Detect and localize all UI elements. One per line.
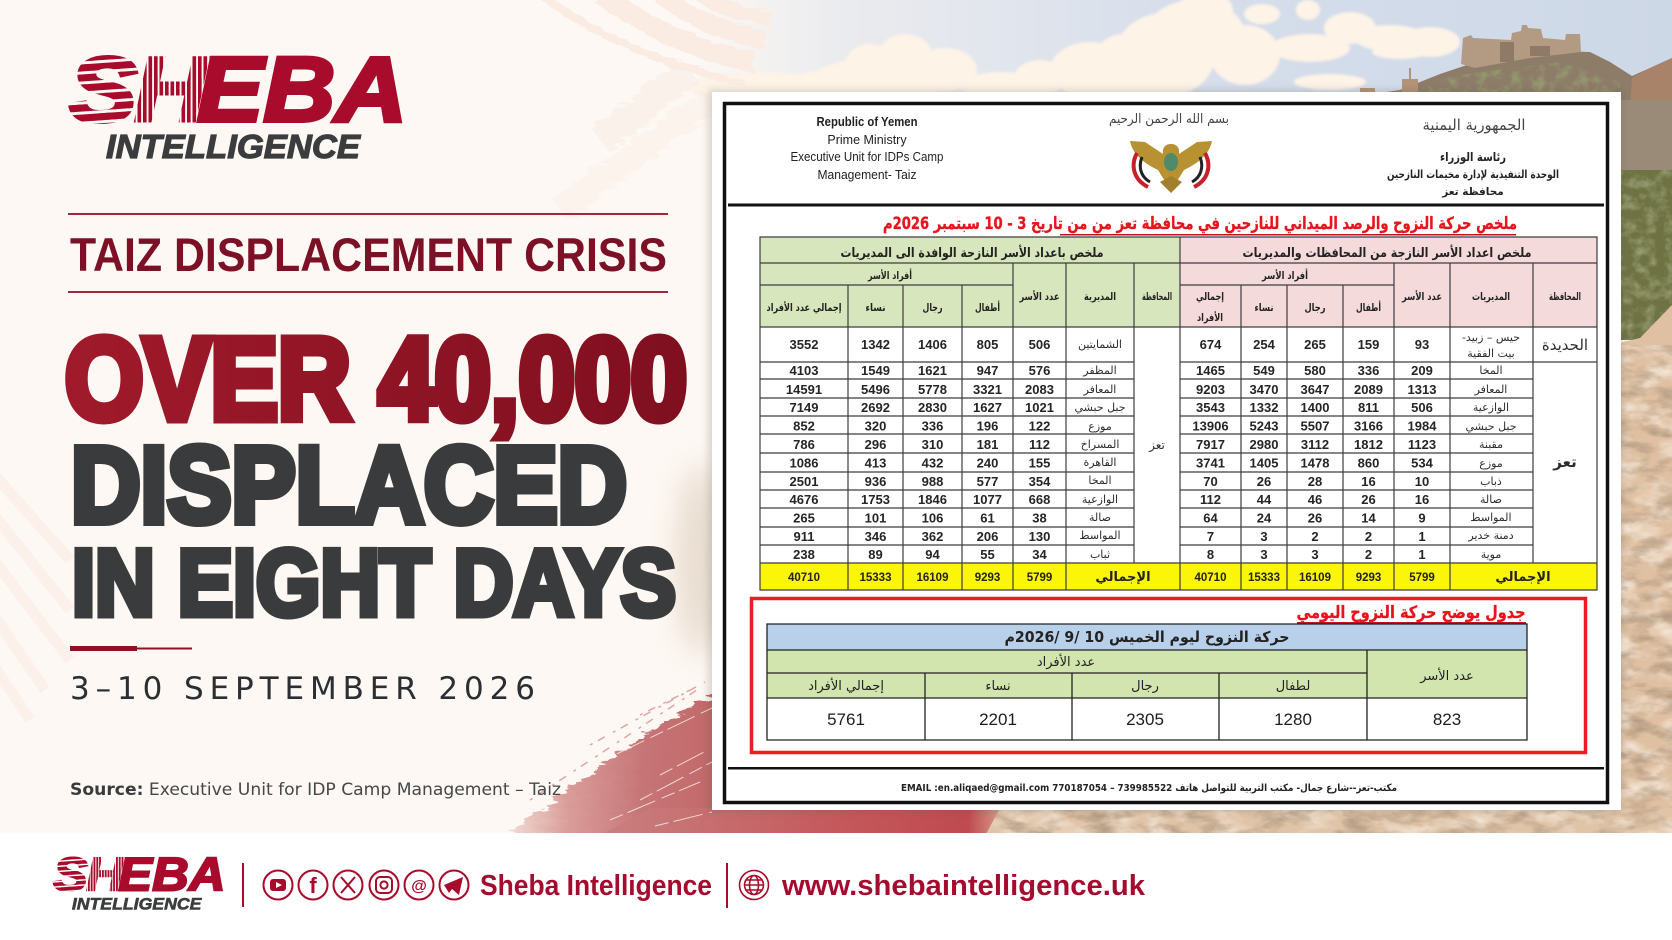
left row: Al-Shamayatain: 1342 bbox=[861, 337, 890, 352]
background: faint brush arcs top bbox=[540, 0, 770, 210]
date: 3–10 SEPTEMBER 2026 bbox=[70, 671, 535, 707]
daily box title: جدول يوضح حركة النزوح اليومي bbox=[1296, 603, 1526, 623]
daily table values: 823 bbox=[1433, 710, 1461, 729]
left row: Al-Wazeiyah: 1077 bbox=[973, 492, 1002, 507]
right row: Jabal Habashi bbox=[1192, 418, 1517, 434]
footer: white band bbox=[0, 833, 1672, 940]
document header: English: Executive Unit for IDPs Camp bbox=[790, 150, 944, 164]
right row: totals: 40710 bbox=[1195, 572, 1226, 584]
headline: over 40,000: OVER 40,000 bbox=[65, 314, 687, 444]
left row: Al-Qahirah: 155 bbox=[1029, 456, 1050, 470]
left row: Al-Muzaffar: 947 bbox=[977, 363, 998, 378]
source line: Source: Executive Unit for IDP Camp Management – Taiz bbox=[70, 780, 561, 800]
right row: Maqbanah: مقبنة bbox=[1479, 438, 1503, 451]
left row: Al-Qahirah: 413 bbox=[865, 456, 886, 470]
right row: Mawiyah: 2 bbox=[1365, 547, 1372, 562]
footer divider bbox=[242, 863, 244, 907]
table headers: displaced families (right): عدد الأسر bbox=[1401, 290, 1442, 303]
icon: facebook bbox=[298, 870, 328, 900]
document header: Arabic: الوحدة التنفيذية لإدارة مخيمات النازحين bbox=[1387, 168, 1559, 181]
panel: official document bbox=[712, 92, 1621, 810]
right row: Salah: 16 bbox=[1415, 492, 1429, 507]
daily table column labels bbox=[808, 653, 1474, 694]
left row: Al-Wazeiyah: 1846 bbox=[918, 492, 947, 507]
right row: Al-Maafer: 3470 bbox=[1250, 382, 1278, 397]
left row: Al-Muzaffar: 576 bbox=[1029, 363, 1050, 378]
icon: threads: @ bbox=[411, 878, 427, 895]
right row: Dimnat Khadir: 3 bbox=[1260, 529, 1268, 544]
right row: Dhubab: ذباب bbox=[1480, 475, 1502, 488]
left row: Al-Wazeiyah bbox=[790, 492, 1118, 507]
left row: Al-Mawasit: 346 bbox=[865, 529, 886, 544]
left row: Thubab: 94 bbox=[925, 547, 940, 562]
left row: Al-Muzaffar: 1549 bbox=[861, 363, 890, 378]
right row: Al-Maafer bbox=[1196, 382, 1507, 397]
logo: Sheba Intelligence: H bbox=[134, 39, 209, 141]
right row: Jabal Habashi: 5507 bbox=[1301, 418, 1329, 434]
document header: English: Management- Taiz bbox=[818, 168, 916, 182]
accent bar bbox=[70, 646, 192, 651]
table headers: displaced families (right): نساء bbox=[1254, 302, 1274, 314]
right row: Dimnat Khadir: دمنة خدير bbox=[1467, 529, 1514, 542]
daily table column labels: نساء bbox=[985, 679, 1011, 694]
left row: Al-Shamayatain bbox=[790, 337, 1122, 352]
right row: Mawiyah bbox=[1207, 547, 1501, 562]
left row: Salah: 106 bbox=[922, 510, 943, 526]
document footer contact line: مكتب-تعز--شارع جمال- مكتب التربية للتواصل هاتف 739985522 – 770187054 EMAIL :en.aliqaed@gmail.com bbox=[901, 783, 1397, 794]
background: faint brush stripes left bbox=[0, 470, 70, 720]
right row: Al-Mawasit: 14 bbox=[1361, 510, 1376, 526]
left row: Al-Maafer: المعافر bbox=[1083, 383, 1116, 396]
title block: Taiz displacement crisis with rules: TAIZ DISPLACEMENT CRISIS bbox=[70, 228, 667, 281]
left row: Thubab: ثباب bbox=[1090, 548, 1110, 561]
right row: Al-Wazeiyah: 811 bbox=[1358, 400, 1379, 415]
right row: Hays Zabid Bayt al-Faqih: 674 bbox=[1200, 337, 1222, 352]
right row: Mawza bbox=[1196, 456, 1503, 470]
table headers: displaced families (right): الأفراد bbox=[1197, 311, 1223, 324]
footer brand name: Sheba Intelligence bbox=[480, 870, 712, 902]
left row: totals: 5799 bbox=[1027, 572, 1052, 584]
footer website: www.shebaintelligence.uk bbox=[781, 870, 1146, 902]
right row: Hays Zabid Bayt al-Faqih bbox=[1200, 331, 1520, 360]
left row: Al-Wazeiyah: 4676 bbox=[790, 492, 818, 507]
footer logo: S bbox=[53, 849, 88, 901]
right row: Al-Maafer: 1313 bbox=[1408, 382, 1436, 397]
logo: Sheba Intelligence: INTELLIGENCE bbox=[106, 128, 361, 165]
footer logo bbox=[53, 849, 225, 914]
daily table column labels: رجال bbox=[1131, 679, 1159, 694]
right row: Al-Wazeiyah: 506 bbox=[1411, 400, 1433, 415]
right row: totals: 16109 bbox=[1299, 572, 1331, 584]
daily table column labels: عدد الأسر bbox=[1419, 667, 1474, 684]
table headers: arriving families (left) bbox=[766, 244, 1172, 314]
right row: Al-Maafer: 2089 bbox=[1354, 382, 1383, 397]
left row: Salah: 101 bbox=[865, 510, 886, 526]
right row: Hays Zabid Bayt al-Faqih: بيت الفقية bbox=[1467, 347, 1515, 360]
left row: Al-Maafer: 5496 bbox=[861, 382, 890, 397]
icon: x bbox=[334, 870, 362, 900]
right row: Dimnat Khadir: 2 bbox=[1311, 529, 1319, 544]
right row: totals: الإجمالي bbox=[1495, 570, 1551, 585]
left row: Al-Misrakh: المسراخ bbox=[1081, 438, 1119, 451]
right row: Dhubab: 16 bbox=[1361, 474, 1376, 489]
right row: Jabal Habashi: 3166 bbox=[1354, 418, 1383, 434]
left row: Al-Maafer: 2083 bbox=[1025, 382, 1054, 397]
daily table column labels: إجمالي الأفراد bbox=[808, 677, 884, 694]
background: right rocky hillside bbox=[1610, 100, 1672, 833]
right row: Al-Wazeiyah: الوازعية bbox=[1473, 401, 1509, 414]
right row: Hays Zabid Bayt al-Faqih: 254 bbox=[1253, 337, 1276, 352]
left row: Al-Misrakh: 181 bbox=[977, 437, 998, 452]
left row: Al-Shamayatain: الشمايتين bbox=[1078, 338, 1122, 351]
right row: Mawza: 1405 bbox=[1250, 456, 1278, 470]
icon: threads bbox=[404, 870, 434, 900]
table headers: arriving families (left): ملخص باعداد الأسر النازحة الوافدة الى المديريات bbox=[840, 244, 1104, 261]
table headers: arriving families (left): إجمالي عدد الأفراد bbox=[766, 301, 842, 314]
right row: Al-Makha bbox=[1196, 363, 1503, 378]
footer logo: H bbox=[86, 849, 124, 901]
left row: Al-Mawasit: 130 bbox=[1029, 529, 1050, 544]
right row: Dhubab: 70 bbox=[1203, 474, 1218, 489]
right row: Salah bbox=[1200, 492, 1502, 507]
right row: Salah: 46 bbox=[1308, 492, 1322, 507]
right row: Al-Makha: المخا bbox=[1479, 364, 1503, 377]
left row: Al-Muzaffar bbox=[790, 363, 1117, 378]
right row: Mawiyah: 3 bbox=[1311, 547, 1319, 562]
left row: Al-Shamayatain: 3552 bbox=[790, 337, 818, 352]
left row: Al-Wazeiyah: 1753 bbox=[861, 492, 890, 507]
left row: Al-Misrakh: 786 bbox=[793, 437, 815, 452]
left row: Thubab: 34 bbox=[1032, 547, 1047, 562]
left row: Al-Makha: 577 bbox=[977, 474, 998, 489]
table headers: displaced families (right): أطفال bbox=[1356, 300, 1381, 314]
left row: Jabal Habashi: 2692 bbox=[861, 400, 890, 415]
right row: totals: 9293 bbox=[1356, 572, 1381, 584]
left row: totals bbox=[788, 570, 1151, 585]
document header: English bbox=[790, 115, 944, 182]
left row: Al-Qahirah: 1086 bbox=[790, 456, 818, 470]
left row: totals: 15333 bbox=[860, 572, 891, 584]
document title: ملخص حركة النزوح والرصد الميداني للنازحين في محافظة تعز من من تاريخ 3 - 10 سبتمبر 2026م bbox=[883, 214, 1517, 234]
right row: Salah: صالة bbox=[1480, 493, 1502, 506]
table headers: arriving families (left): عدد الأسر bbox=[1019, 290, 1060, 303]
right row: Maqbanah bbox=[1196, 437, 1503, 452]
right row: Mawiyah: موية bbox=[1481, 548, 1501, 561]
right row: Al-Makha: 209 bbox=[1411, 363, 1433, 378]
right row: Al-Wazeiyah: 1400 bbox=[1301, 400, 1329, 415]
left row: Jabal Habashi: 2830 bbox=[918, 400, 947, 415]
icon: telegram bbox=[440, 870, 468, 900]
background: bottom rock strip bbox=[960, 808, 1672, 833]
right row: Al-Makha: 580 bbox=[1304, 363, 1326, 378]
left row: Al-Maafer: 14591 bbox=[786, 382, 822, 397]
left row: Jabal Habashi: جبل حبشي bbox=[1074, 401, 1126, 414]
right row: Maqbanah: 1812 bbox=[1354, 437, 1383, 452]
right row: Hays Zabid Bayt al-Faqih: 265 bbox=[1304, 337, 1326, 352]
document header: bismillah: بسم الله الرحمن الرحيم bbox=[1109, 112, 1229, 127]
left row: Mawza: 336 bbox=[922, 418, 943, 434]
right row: Al-Mawasit: 24 bbox=[1257, 510, 1272, 526]
right row: Maqbanah: 2980 bbox=[1250, 437, 1278, 452]
table: displaced families summary bbox=[760, 237, 1597, 590]
table headers: arriving families (left): نساء bbox=[866, 302, 886, 314]
left row: Mawza: 320 bbox=[865, 418, 886, 434]
right row: Mawiyah: 8 bbox=[1207, 547, 1214, 562]
right row: Maqbanah: 7917 bbox=[1196, 437, 1225, 452]
footer social icons bbox=[264, 870, 468, 900]
left row: Al-Wazeiyah: 668 bbox=[1029, 492, 1050, 507]
table headers: arriving families (left): أفراد الأسر bbox=[867, 268, 912, 282]
table headers: arriving families (left): رجال bbox=[922, 302, 942, 314]
left row: Al-Maafer bbox=[786, 382, 1116, 397]
left row: Thubab: 89 bbox=[868, 547, 883, 562]
panel shadow bbox=[708, 90, 1622, 812]
right row: Al-Makha: 336 bbox=[1358, 363, 1379, 378]
left row: Al-Mawasit: المواسط bbox=[1079, 529, 1121, 542]
icon: Yemen emblem bbox=[1130, 141, 1212, 193]
right row: Mawza: موزع bbox=[1479, 457, 1503, 470]
governorate labels bbox=[1148, 336, 1588, 471]
background: sky bbox=[690, 0, 1672, 110]
daily table values bbox=[827, 710, 1461, 729]
right row: Al-Mawasit: 64 bbox=[1203, 510, 1218, 526]
logo: Sheba Intelligence: S bbox=[69, 39, 137, 141]
right row: Dhubab: 26 bbox=[1257, 474, 1271, 489]
left row: Al-Makha: 2501 bbox=[790, 474, 818, 489]
right row: Al-Mawasit: 26 bbox=[1308, 510, 1322, 526]
document header: Arabic: رئاسة الوزراء bbox=[1440, 150, 1506, 165]
right row: Jabal Habashi: 5243 bbox=[1250, 418, 1278, 434]
left row: Al-Misrakh: 296 bbox=[865, 437, 886, 452]
left row: totals: 40710 bbox=[788, 572, 820, 584]
right row: Dhubab bbox=[1203, 474, 1502, 489]
left row: Al-Makha: 936 bbox=[865, 474, 886, 489]
right row: Mawza: 534 bbox=[1411, 456, 1434, 470]
left row: Thubab: 55 bbox=[980, 547, 995, 562]
right row: Al-Wazeiyah: 1332 bbox=[1250, 400, 1278, 415]
table: daily displacement bbox=[767, 624, 1527, 740]
table headers: displaced families (right): ملخص اعداد الأسر النازجة من المحافظات والمديريات bbox=[1242, 244, 1532, 261]
left row: Salah: 61 bbox=[980, 510, 995, 526]
document header: Arabic: الجمهورية اليمنية bbox=[1422, 116, 1526, 134]
right row: Dimnat Khadir: 7 bbox=[1207, 529, 1214, 544]
daily table values: 2201 bbox=[979, 710, 1017, 729]
left row: totals: 16109 bbox=[917, 572, 948, 584]
document header: Arabic: محافظة تعز bbox=[1441, 186, 1504, 198]
right row: Maqbanah: 1123 bbox=[1408, 437, 1436, 452]
right row: Al-Mawasit: 9 bbox=[1418, 510, 1426, 526]
governorate labels: الحديدة bbox=[1542, 336, 1588, 354]
governorate labels: تعز bbox=[1552, 453, 1577, 471]
left row: Mawza bbox=[793, 418, 1112, 434]
governorate labels: تعز bbox=[1148, 438, 1165, 453]
daily table values: 5761 bbox=[827, 710, 865, 729]
right row: Dimnat Khadir bbox=[1207, 529, 1514, 544]
left row: Al-Makha: 354 bbox=[1029, 474, 1051, 489]
right row: totals bbox=[1195, 570, 1551, 585]
right row: Dhubab: 28 bbox=[1308, 474, 1322, 489]
left row: Al-Mawasit: 911 bbox=[794, 529, 814, 544]
headline: displaced: DISPLACED bbox=[71, 424, 627, 545]
daily table heading: حركة النزوح ليوم الخميس 10 /9 /2026م bbox=[1004, 628, 1290, 646]
right row: totals: 5799 bbox=[1409, 572, 1435, 584]
logo: Sheba Intelligence: EBA bbox=[197, 39, 407, 141]
table headers: displaced families (right) bbox=[1196, 244, 1581, 324]
left row: Mawza: 122 bbox=[1029, 418, 1050, 434]
left row: totals: 9293 bbox=[975, 572, 1000, 584]
left row: Mawza: 852 bbox=[793, 418, 815, 434]
left row: Thubab bbox=[793, 547, 1110, 562]
right row: Hays Zabid Bayt al-Faqih: 159 bbox=[1358, 337, 1379, 352]
right row: Al-Makha: 549 bbox=[1253, 363, 1275, 378]
left row: Al-Qahirah: 432 bbox=[922, 456, 943, 470]
left row: Al-Mawasit: 362 bbox=[922, 529, 943, 544]
left row: Salah: صالة bbox=[1089, 511, 1111, 524]
panel: daily displacement box bbox=[752, 598, 1586, 752]
daily table values: 1280 bbox=[1274, 710, 1312, 729]
right row: Salah: 26 bbox=[1361, 492, 1376, 507]
table headers: displaced families (right): المحافظة bbox=[1549, 291, 1581, 303]
right row: Hays Zabid Bayt al-Faqih: 93 bbox=[1415, 337, 1429, 352]
right row: Al-Makha: 1465 bbox=[1196, 363, 1225, 378]
logo: Sheba Intelligence bbox=[69, 39, 407, 165]
right row: Mawza: 3741 bbox=[1196, 456, 1225, 470]
left row: Al-Misrakh: 112 bbox=[1029, 437, 1050, 452]
table headers: displaced families (right): أفراد الأسر bbox=[1261, 268, 1308, 282]
background: red brush stroke bbox=[0, 682, 1672, 837]
left row: Jabal Habashi: 7149 bbox=[790, 400, 818, 415]
left row: Al-Mawasit: 206 bbox=[977, 529, 998, 544]
left row: Mawza: 196 bbox=[977, 418, 998, 434]
left row: Al-Muzaffar: 1621 bbox=[918, 363, 947, 378]
daily table column labels: لطفال bbox=[1276, 679, 1310, 694]
daily table values: 2305 bbox=[1126, 710, 1164, 729]
table headers: arriving families (left): أطفال bbox=[975, 300, 1000, 314]
right row: Dimnat Khadir: 2 bbox=[1365, 529, 1372, 544]
right row: Al-Maafer: 3647 bbox=[1301, 382, 1329, 397]
table headers: arriving families (left): المحافظة bbox=[1142, 291, 1172, 303]
left row: Al-Maafer: 5778 bbox=[918, 382, 947, 397]
right row: Maqbanah: 3112 bbox=[1301, 437, 1329, 452]
left row: Jabal Habashi bbox=[790, 400, 1126, 415]
right row: Al-Mawasit bbox=[1203, 510, 1512, 526]
daily table column labels: عدد الأفراد bbox=[1037, 653, 1095, 670]
icon: instagram bbox=[370, 870, 398, 900]
right row: Jabal Habashi: 1984 bbox=[1408, 418, 1437, 434]
left row: Al-Makha bbox=[790, 474, 1112, 489]
left row: Jabal Habashi: 1021 bbox=[1025, 400, 1054, 415]
icon: globe bbox=[740, 870, 768, 900]
right row: Hays Zabid Bayt al-Faqih: حيس – زبيد- bbox=[1462, 331, 1520, 344]
left row: Al-Makha: المخا bbox=[1088, 474, 1112, 487]
left row: Al-Muzaffar: المظفر bbox=[1082, 364, 1117, 377]
right row: Dimnat Khadir: 1 bbox=[1418, 529, 1426, 544]
footer logo: EBA bbox=[118, 849, 225, 901]
document header: English: Prime Ministry bbox=[827, 133, 907, 147]
right row: Salah: 112 bbox=[1200, 492, 1221, 507]
document header: English: Republic of Yemen bbox=[816, 115, 918, 129]
left row: Al-Shamayatain: 805 bbox=[977, 337, 998, 352]
left row: Al-Shamayatain: 506 bbox=[1029, 337, 1050, 352]
background: clouds bbox=[690, 0, 1460, 104]
right row: Mawiyah: 1 bbox=[1418, 547, 1426, 562]
background: hilltop castle landscape bbox=[1360, 25, 1672, 120]
left row: Jabal Habashi: 1627 bbox=[973, 400, 1002, 415]
left row: Salah: 38 bbox=[1032, 510, 1047, 526]
left row: Al-Misrakh bbox=[793, 437, 1119, 452]
footer divider two bbox=[726, 863, 728, 908]
right row: Al-Maafer: المعافر bbox=[1474, 383, 1507, 396]
right row: Al-Mawasit: المواسط bbox=[1470, 511, 1512, 524]
right row: Dhubab: 10 bbox=[1415, 474, 1429, 489]
right row: totals: 15333 bbox=[1248, 572, 1280, 584]
left row: Al-Qahirah: 240 bbox=[977, 456, 998, 470]
left row: Al-Mawasit bbox=[794, 529, 1121, 544]
footer logo: INTELLIGENCE bbox=[72, 895, 202, 914]
right row: Salah: 44 bbox=[1257, 492, 1272, 507]
table headers: displaced families (right): المديريات bbox=[1472, 291, 1510, 303]
left row: Al-Misrakh: 310 bbox=[922, 437, 943, 452]
left row: Salah bbox=[793, 510, 1111, 526]
headline: in eight days: IN EIGHT DAYS bbox=[72, 530, 676, 635]
table headers: arriving families (left): المديرية bbox=[1084, 291, 1116, 303]
left row: Al-Shamayatain: 1406 bbox=[918, 337, 947, 352]
right row: Al-Wazeiyah bbox=[1196, 400, 1509, 415]
document header: Arabic bbox=[1387, 116, 1559, 198]
right row: Mawiyah: 3 bbox=[1260, 547, 1268, 562]
table headers: displaced families (right): إجمالي bbox=[1196, 291, 1224, 303]
left row: Mawza: موزع bbox=[1088, 420, 1112, 433]
left row: Al-Wazeiyah: الوازعية bbox=[1082, 493, 1118, 506]
left row: Al-Muzaffar: 4103 bbox=[790, 363, 818, 378]
left row: Salah: 265 bbox=[793, 510, 815, 526]
right row: Mawza: 860 bbox=[1358, 456, 1379, 470]
right row: Jabal Habashi: 13906 bbox=[1192, 418, 1229, 434]
left row: totals: الإجمالي bbox=[1095, 570, 1151, 585]
left row: Al-Qahirah bbox=[790, 456, 1116, 470]
right row: Mawza: 1478 bbox=[1301, 456, 1329, 470]
background: beige dust near panel bbox=[676, 465, 724, 655]
left row: Al-Qahirah: القاهرة bbox=[1084, 456, 1116, 469]
table headers: displaced families (right): رجال bbox=[1304, 302, 1326, 314]
right row: Al-Maafer: 9203 bbox=[1196, 382, 1225, 397]
left row: Al-Maafer: 3321 bbox=[973, 382, 1002, 397]
right row: Jabal Habashi: جبل حبشي bbox=[1465, 420, 1517, 433]
left row: Thubab: 238 bbox=[793, 547, 815, 562]
right row: Al-Wazeiyah: 3543 bbox=[1196, 400, 1225, 415]
icon: facebook: f bbox=[309, 873, 317, 898]
icon: youtube bbox=[264, 870, 292, 900]
left row: Al-Makha: 988 bbox=[922, 474, 943, 489]
